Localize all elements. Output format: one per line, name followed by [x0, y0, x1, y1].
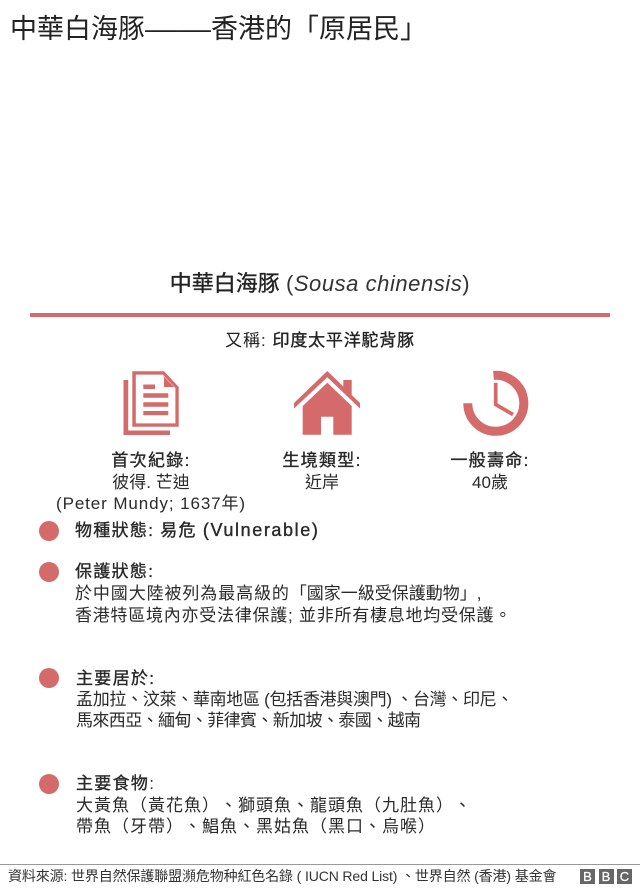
species heading: 中華白海豚 (Sousa chinensis) [170, 271, 470, 296]
icon: document [124, 371, 179, 435]
icon: house [294, 371, 360, 435]
fact: habitat: 生境類型: [282, 451, 362, 470]
text: diet: 大黃魚（黃花魚）、獅頭魚、龍頭魚（九肚魚）、 [76, 796, 472, 814]
text: range: 孟加拉、汶萊、華南地區 (包括香港與澳門) 、台灣、印尼、 [76, 690, 513, 709]
bullet: diet [39, 774, 59, 794]
fact: first record [56, 451, 246, 513]
logo: BBC: B [583, 869, 592, 884]
fact: lifespan [450, 451, 530, 492]
fact: habitat [282, 451, 362, 492]
icon: clock [463, 370, 528, 436]
text: diet [76, 774, 472, 836]
text: protection status: 保護狀態: [75, 562, 154, 581]
footer rule [0, 864, 640, 865]
logo: BBC: C [620, 869, 629, 884]
text: diet: 主要食物: [76, 774, 154, 793]
text: protection status: 香港特區境內亦受法律保護; 並非所有棲息地均受保護。 [75, 606, 512, 625]
logo: BBC [580, 869, 632, 884]
text: range: 馬來西亞、緬甸、菲律賓、新加坡、泰國、越南 [76, 711, 420, 730]
bullet: protection status [39, 562, 59, 582]
text: species status: 物種狀態: 易危 (Vulnerable) [75, 520, 319, 540]
title: —— [145, 14, 211, 44]
text: range: 主要居於: [76, 669, 155, 688]
alternative name: 又稱: 印度太平洋駝背豚 [225, 331, 415, 350]
text: protection status [75, 562, 512, 625]
logo: BBC: B [602, 869, 610, 884]
fact: lifespan: 40歲 [472, 472, 508, 492]
title: 中華白海豚 香港的「原居民」 [10, 14, 427, 44]
fact: first record: (Peter Mundy; 1637年) [56, 494, 246, 513]
fact: habitat: 近岸 [305, 472, 339, 492]
bullet: range [39, 668, 59, 688]
bullet: species status [39, 521, 59, 541]
heading rule [30, 313, 610, 317]
fact: first record: 首次紀錄: [111, 451, 191, 470]
fact: lifespan: 一般壽命: [450, 451, 530, 470]
fact: first record: 彼得. 芒迪 [112, 472, 190, 492]
source: 資料來源: 世界自然保護聯盟瀕危物种紅色名錄 ( IUCN Red List) 、世界自然 (香港) 基金會 [8, 868, 556, 884]
text: range [76, 669, 513, 730]
text: protection status: 於中國大陸被列為最高級的「國家一級受保護動物」, [75, 584, 482, 603]
text: diet: 帶魚（牙帶）、鯧魚、黑姑魚（黑口、烏喉） [76, 817, 436, 836]
